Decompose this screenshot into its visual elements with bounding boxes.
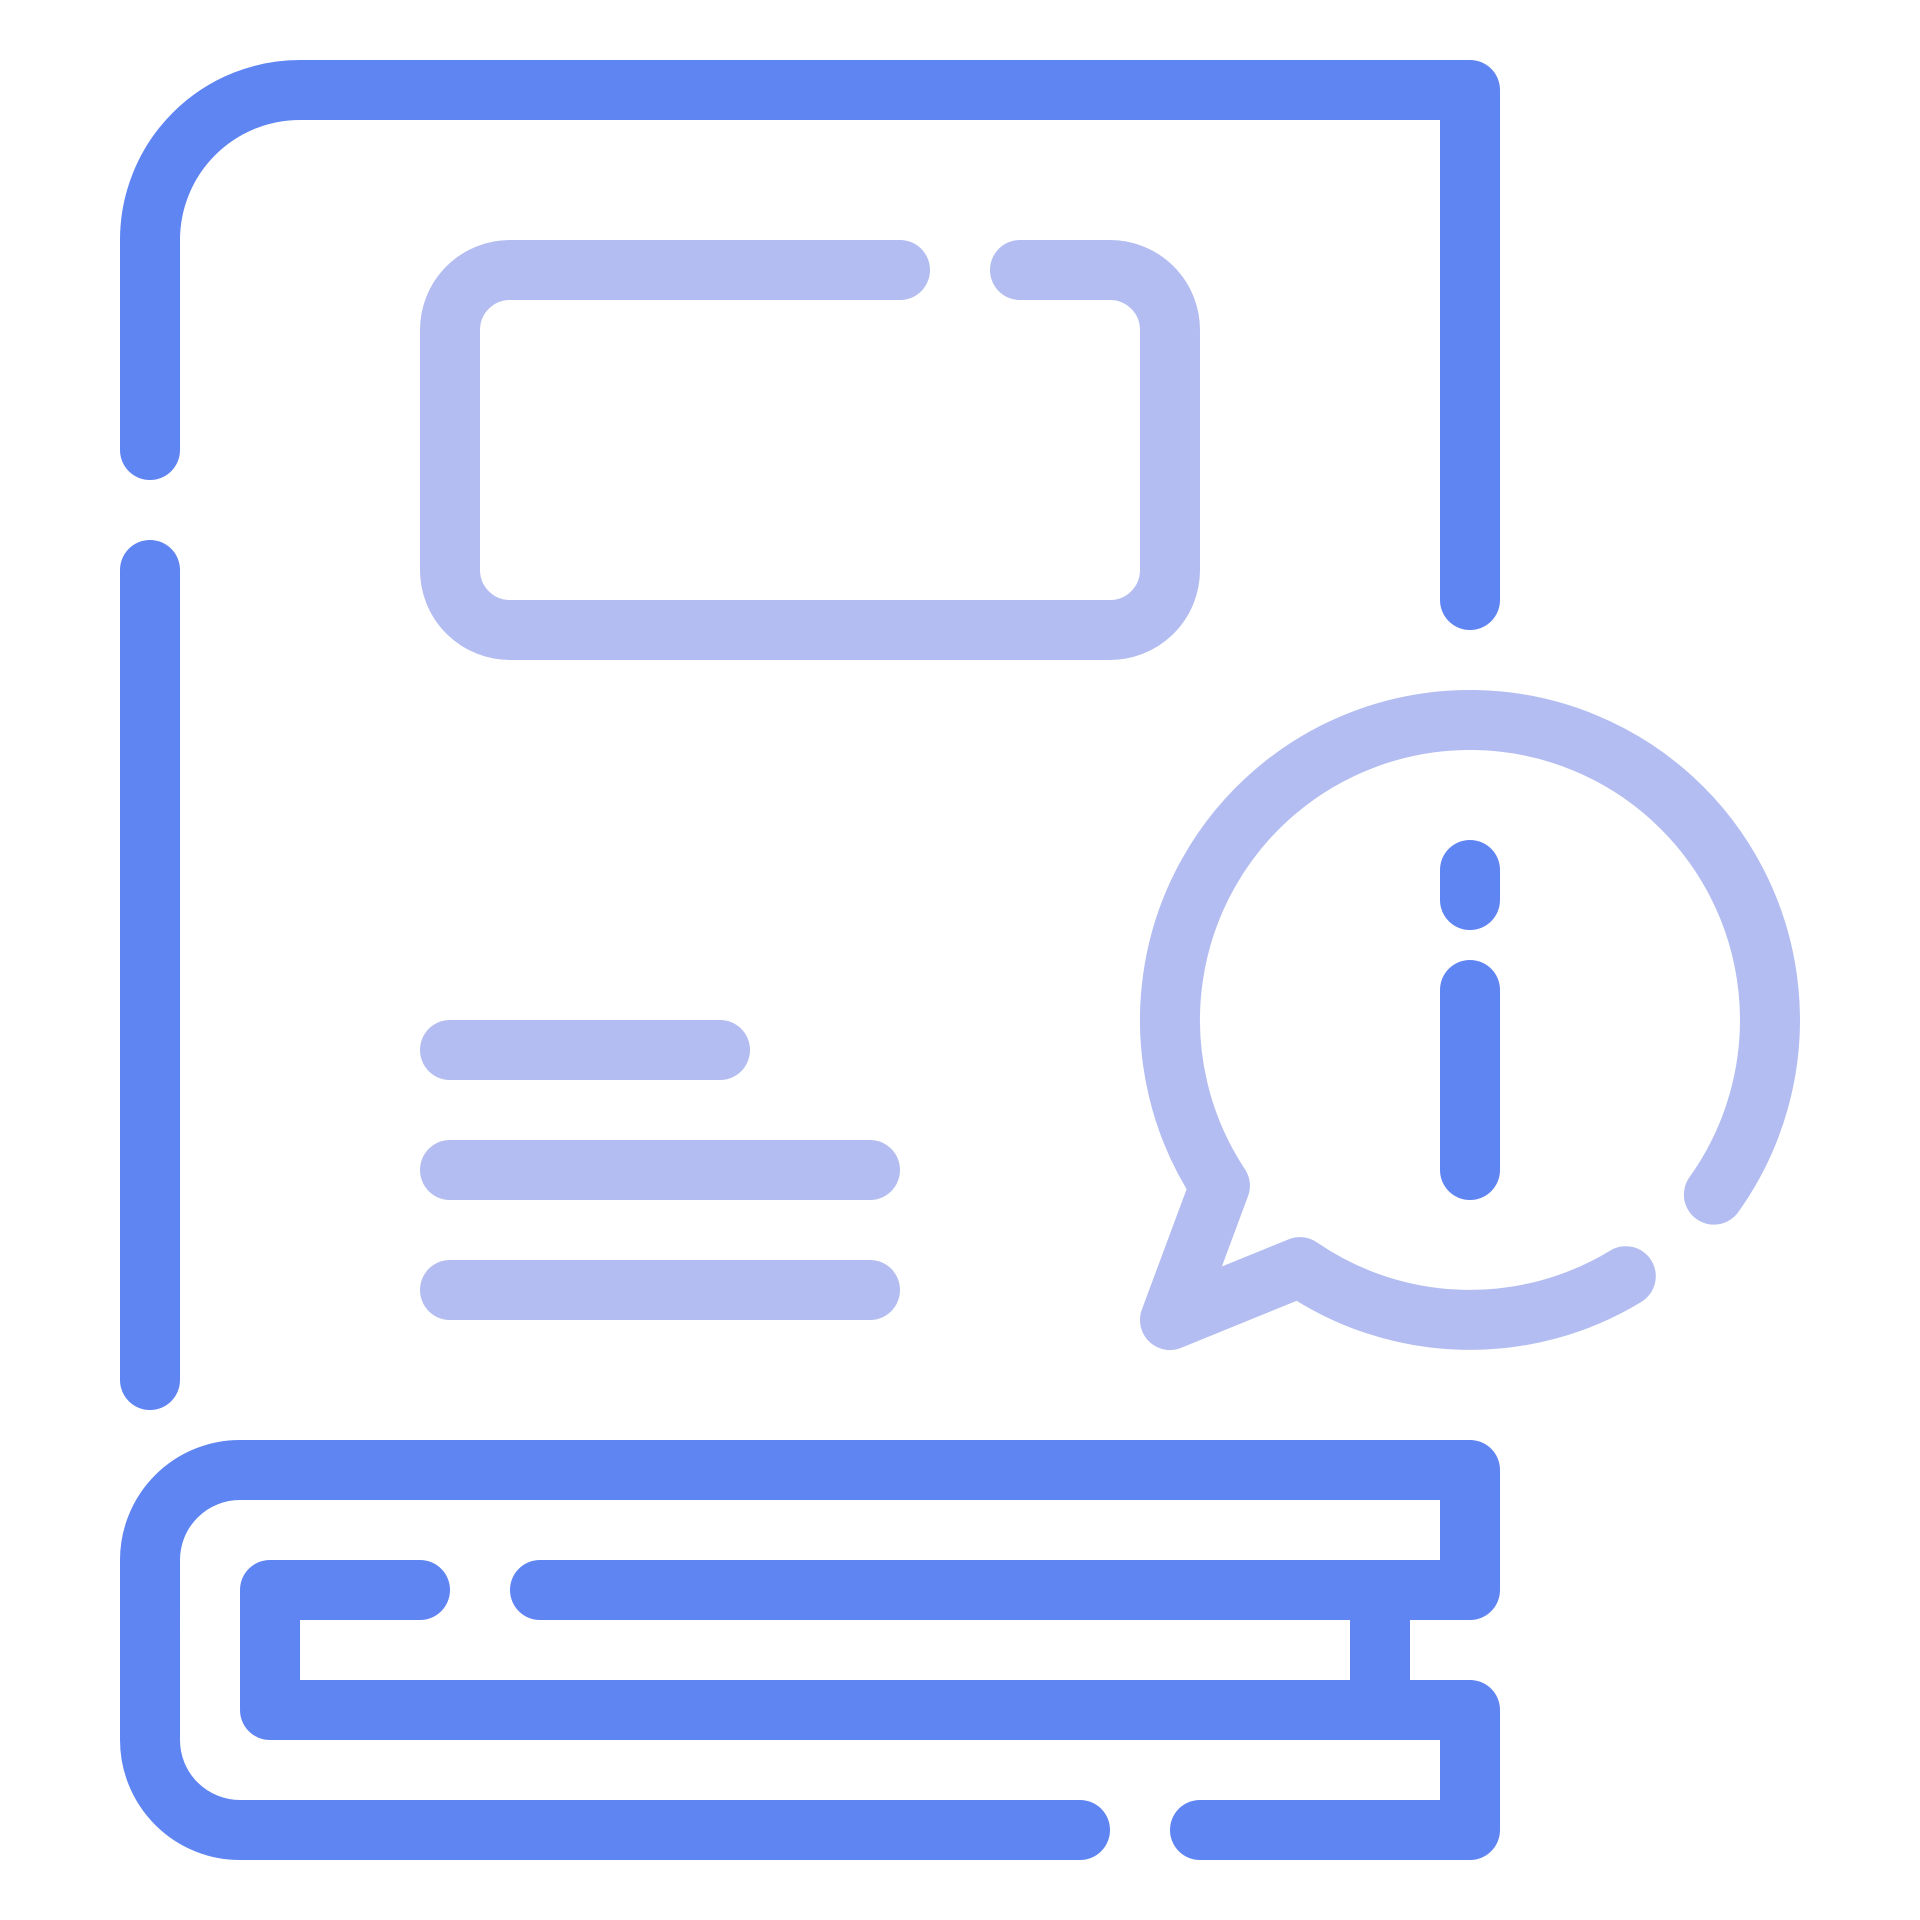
book cover outline: top and right edge xyxy=(150,90,1470,600)
icon: info letter i xyxy=(1440,870,1500,1170)
book spine: left edge xyxy=(120,570,180,1380)
book pages: bottom block xyxy=(150,1470,1470,1830)
cover label panel xyxy=(450,270,1170,630)
speech bubble xyxy=(1170,720,1770,1320)
text lines xyxy=(450,1050,870,1290)
